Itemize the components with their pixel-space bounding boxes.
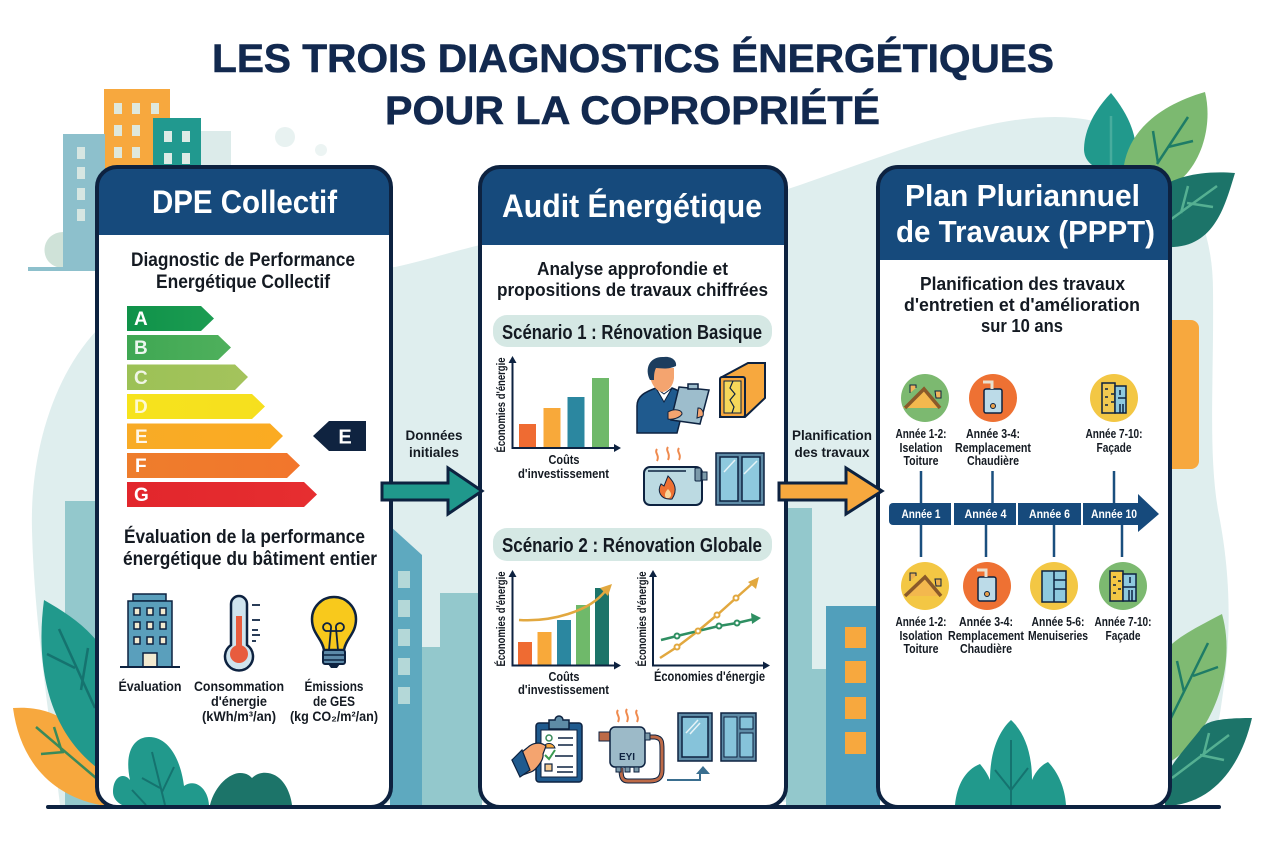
header: Plan Pluriannuel: Plan Pluriannuel	[905, 178, 1140, 213]
header: Audit Énergétique	[480, 167, 786, 245]
label: GHG emissions: Émissions	[304, 678, 364, 694]
text: whole building evaluation	[123, 526, 378, 570]
header: DPE Collectif: DPE Collectif	[152, 184, 337, 220]
bar chart: scenario 2	[493, 570, 621, 697]
arrow: panel 1 to panel 2	[382, 468, 482, 514]
icon: boiler with pipes: EYI	[619, 752, 635, 763]
label: evaluation: Évaluation	[118, 678, 182, 694]
ground line	[46, 805, 1221, 809]
milestone top: facade: Année 7-10:	[1086, 427, 1142, 441]
panel frame	[480, 167, 786, 807]
label: energy consumption: (kWh/m³/an)	[202, 708, 276, 724]
milestone top: facade	[1086, 374, 1142, 455]
label: GHG emissions: de GES	[313, 693, 355, 709]
label: GHG emissions	[290, 678, 378, 724]
timeline connectors	[921, 471, 1122, 557]
milestone bottom: facade: Année 7-10:	[1094, 615, 1152, 629]
header: DPE Collectif	[97, 167, 391, 235]
milestone bottom: boiler replacement	[948, 562, 1025, 656]
subtitle: diagnostic: Diagnostic de Performance	[131, 250, 355, 271]
milestone top: boiler replacement	[955, 374, 1032, 468]
timeline arrow: Année 10	[1091, 507, 1137, 521]
icon: clipboard with hand	[512, 716, 582, 782]
bar chart: scenario 1	[493, 356, 621, 481]
bar chart: scenario 1: Coûts	[548, 452, 580, 467]
bar chart: scenario 2: Économies d'énergie	[493, 571, 508, 666]
leaves top right	[1084, 92, 1235, 247]
milestone bottom: roof insulation: Toiture	[904, 642, 939, 656]
label: energy consumption	[194, 678, 284, 724]
timeline arrow	[889, 494, 1159, 532]
label: initial data: initiales	[409, 445, 459, 460]
milestone top: boiler replacement: Chaudière	[967, 454, 1019, 468]
milestone bottom: roof insulation: Isolation	[900, 629, 942, 643]
text: whole building evaluation: énergétique du bâtiment entier	[123, 549, 378, 570]
icon: auditor with clipboard	[637, 357, 709, 433]
timeline arrow: Année 6	[1029, 507, 1070, 521]
city buildings top left	[28, 89, 327, 271]
title: POUR LA COPROPRIÉTÉ	[385, 88, 880, 133]
arrow: window upgrade	[667, 766, 710, 780]
label: GHG emissions: (kg CO₂/m²/an)	[290, 708, 378, 724]
subtitle: plan: d'entretien et d'amélioration	[904, 294, 1140, 315]
icon: insulation block	[720, 363, 765, 417]
milestone bottom: facade: Façade	[1106, 629, 1141, 643]
text: whole building evaluation: Évaluation de la performance	[124, 526, 365, 548]
energy rating scale A to G	[127, 306, 317, 507]
header: Audit Énergétique: Audit Énergétique	[502, 188, 762, 224]
background blob	[32, 117, 1229, 805]
subtitle: plan: Planification des travaux	[920, 273, 1126, 294]
bar chart: scenario 1: d'investissement	[518, 466, 610, 481]
milestone top: facade: Façade	[1096, 441, 1132, 455]
title	[212, 36, 1054, 133]
subtitle: audit: Analyse approfondie et	[537, 258, 728, 279]
panel: Audit Énergétique	[480, 167, 786, 807]
rating marker E: E	[338, 426, 352, 448]
icon: heater with flame	[644, 447, 707, 505]
line chart: scenario 2	[634, 570, 770, 684]
icon: replacement window	[721, 713, 756, 761]
milestone bottom: boiler replacement: Remplacement	[948, 629, 1025, 643]
arrow: panel 2 to panel 3	[779, 468, 882, 514]
subtitle: plan: sur 10 ans	[981, 315, 1063, 336]
milestone top: boiler replacement: Remplacement	[955, 441, 1032, 455]
leaves bottom right	[1165, 614, 1252, 806]
bar chart: scenario 2: Coûts	[548, 669, 580, 684]
energy rating scale A to G: C	[134, 368, 148, 389]
plant inside panel	[113, 737, 292, 805]
scenario 2 label: Scénario 2 : Rénovation Globale	[502, 535, 762, 557]
line chart: scenario 2: Économies d'énergie	[654, 669, 765, 684]
header: Plan Pluriannuel: de Travaux (PPPT)	[896, 214, 1155, 249]
rating marker E	[313, 421, 366, 451]
line chart: scenario 2: Économies d'énergie	[634, 571, 649, 666]
milestone bottom: windows: Année 5-6:	[1032, 615, 1084, 629]
milestone top: roof insulation: Iselation	[900, 441, 942, 455]
scenario 2 label	[493, 528, 772, 561]
label: energy consumption: Consommation	[194, 678, 284, 694]
scenario 1 label	[493, 315, 772, 347]
icon: boiler with pipes	[599, 709, 662, 781]
icon: building	[120, 594, 180, 667]
orange building right	[1150, 320, 1199, 469]
milestone bottom: boiler replacement: Année 3-4:	[959, 615, 1013, 629]
buildings between panels 1 and 2	[390, 526, 482, 805]
header: Plan Pluriannuel	[878, 167, 1170, 260]
label: energy consumption: d'énergie	[211, 693, 267, 709]
label: work planning: Planification	[792, 428, 872, 443]
label: work planning	[792, 428, 872, 460]
icon: thermometer	[225, 596, 260, 670]
energy rating scale A to G: F	[135, 456, 147, 477]
energy rating scale A to G: B	[134, 338, 148, 359]
energy rating scale A to G: E	[135, 427, 148, 448]
plant inside panel	[955, 720, 1066, 805]
milestone top: roof insulation: Toiture	[904, 454, 939, 468]
icon: light bulb	[312, 597, 356, 668]
panel frame	[878, 167, 1170, 807]
label: initial data	[406, 428, 462, 460]
milestone top: roof insulation: Année 1-2:	[896, 427, 946, 441]
bar chart: scenario 1: Économies d'énergie	[493, 357, 508, 452]
title: LES TROIS DIAGNOSTICS ÉNERGÉTIQUES	[212, 36, 1054, 81]
icon: new window	[678, 713, 712, 761]
label: initial data: Données	[406, 428, 462, 443]
energy rating scale A to G: D	[134, 397, 148, 418]
subtitle: plan	[904, 273, 1140, 336]
timeline arrow: Année 1	[902, 507, 941, 521]
subtitle: audit: propositions de travaux chiffrées	[497, 279, 768, 300]
leaves bottom left	[13, 600, 110, 805]
buildings between panels 2 and 3	[786, 508, 880, 808]
milestone bottom: windows: Menuiseries	[1028, 629, 1088, 643]
milestone bottom: facade	[1094, 562, 1152, 643]
energy rating scale A to G: A	[134, 309, 148, 330]
bar chart: scenario 2: d'investissement	[518, 682, 610, 697]
subtitle: diagnostic	[131, 250, 355, 293]
milestone bottom: roof insulation	[896, 562, 949, 656]
energy rating scale A to G: G	[134, 485, 149, 506]
milestone top: roof insulation	[896, 374, 949, 468]
subtitle: diagnostic: Energétique Collectif	[156, 272, 331, 293]
milestone bottom: roof insulation: Année 1-2:	[896, 615, 946, 629]
scenario 1 label: Scénario 1 : Rénovation Basique	[502, 322, 762, 344]
timeline arrow: Année 4	[964, 507, 1007, 521]
building behind left panel	[65, 501, 99, 805]
icon: double window	[716, 453, 764, 505]
label: work planning: des travaux	[794, 445, 870, 460]
panel: Plan Pluriannuel de Travaux	[878, 167, 1170, 807]
panel: DPE Collectif	[97, 167, 391, 807]
milestone bottom: windows	[1028, 562, 1088, 643]
panel frame	[97, 167, 391, 807]
milestone bottom: boiler replacement: Chaudière	[960, 642, 1012, 656]
subtitle: audit	[497, 258, 768, 300]
milestone top: boiler replacement: Année 3-4:	[966, 427, 1020, 441]
